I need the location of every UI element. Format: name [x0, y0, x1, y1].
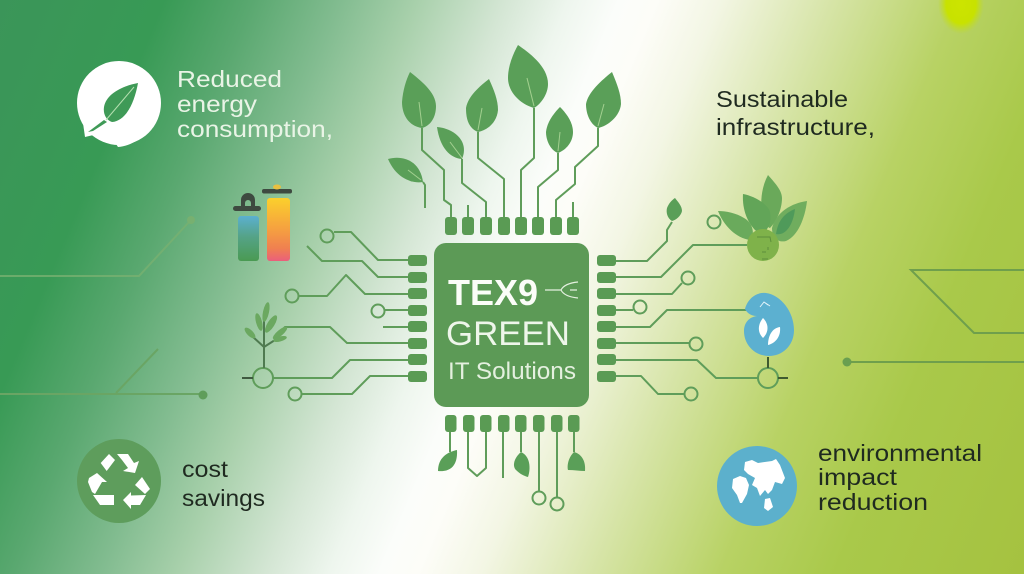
icon: small fork — [545, 282, 578, 298]
leaf stems — [422, 108, 598, 218]
right traces — [616, 198, 788, 400]
icon: globe — [717, 446, 797, 526]
decorative circuit lines left — [0, 216, 208, 400]
text: reduced energy consumption: consumption, — [177, 116, 333, 142]
text: reduced energy consumption: Reduced — [177, 66, 282, 92]
top-right yellow glow — [938, 0, 984, 34]
chip title text — [446, 272, 578, 385]
chip title text: GREEN — [446, 315, 570, 353]
icon: recycle — [77, 439, 161, 523]
icon: batteries — [233, 184, 292, 261]
text: cost savings: savings — [182, 485, 265, 511]
text: cost savings: cost — [182, 456, 229, 482]
text: environmental impact reduction — [818, 440, 982, 515]
left traces — [242, 230, 408, 400]
text: reduced energy consumption: energy — [177, 91, 258, 117]
text: environmental impact reduction: impact — [818, 464, 898, 490]
text: sustainable infrastructure: Sustainable — [716, 86, 848, 112]
text: sustainable infrastructure: infrastructure, — [716, 114, 875, 140]
text: environmental impact reduction: reduction — [818, 489, 928, 515]
text: sustainable infrastructure — [716, 86, 875, 140]
icon: blue seed — [744, 293, 794, 356]
text: environmental impact reduction: environmental — [818, 440, 982, 466]
leaf ribs — [408, 78, 604, 180]
icon: green plant ball — [718, 175, 807, 261]
icon: sapling left — [243, 302, 289, 368]
text: cost savings — [182, 456, 265, 511]
chip title text: TEX9 — [448, 272, 538, 313]
chip pads top — [445, 217, 579, 235]
chip pads right — [597, 255, 616, 382]
chip body — [434, 243, 589, 407]
chip pads left — [408, 255, 427, 382]
chip pads bottom and attachments — [438, 415, 585, 510]
decorative circuit lines right — [842, 270, 1024, 366]
text: reduced energy consumption — [177, 66, 333, 142]
icon: leaf in speech circle — [77, 61, 161, 147]
circuit leaves top — [388, 45, 621, 218]
chip title text: IT Solutions — [448, 358, 576, 385]
leaves — [388, 45, 621, 182]
